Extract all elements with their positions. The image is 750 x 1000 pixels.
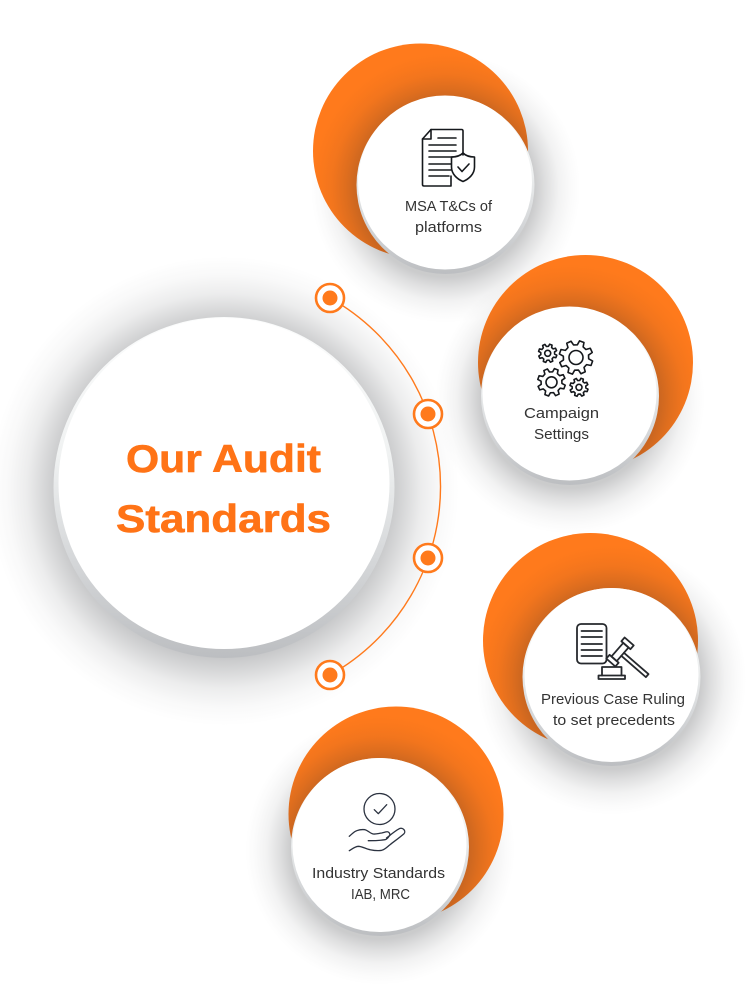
label: IAB, MRC bbox=[351, 887, 410, 903]
panel: Campaign Settings bbox=[435, 255, 705, 534]
title: Our Audit bbox=[126, 438, 321, 481]
icon: document with shield bbox=[422, 130, 474, 186]
icon: gears bbox=[534, 336, 598, 400]
label: Settings bbox=[534, 427, 589, 443]
connector arc with nodes bbox=[316, 284, 442, 689]
node 3 bbox=[414, 544, 442, 572]
panel: Industry Standards bbox=[245, 706, 515, 985]
label bbox=[405, 199, 493, 236]
label: Industry Standards bbox=[312, 866, 445, 882]
label: Campaign bbox=[524, 406, 599, 422]
panel: central circle bbox=[0, 256, 459, 726]
title: Standards bbox=[116, 498, 331, 541]
label: Previous Case Ruling bbox=[541, 692, 685, 708]
label bbox=[541, 692, 685, 729]
node 1 bbox=[316, 284, 344, 312]
label: MSA T&Cs of bbox=[405, 199, 493, 215]
node 4 bbox=[316, 661, 344, 689]
title bbox=[116, 438, 331, 541]
node 2 bbox=[414, 400, 442, 428]
icon: hand with check bbox=[349, 794, 405, 851]
panel: Previous Case Ruling bbox=[476, 533, 746, 815]
label bbox=[312, 866, 445, 903]
panel: MSA T&Cs of platforms bbox=[310, 44, 580, 323]
icon: document and gavel bbox=[577, 624, 656, 686]
label: to set precedents bbox=[553, 713, 675, 729]
label: platforms bbox=[415, 220, 482, 236]
label bbox=[524, 406, 599, 443]
